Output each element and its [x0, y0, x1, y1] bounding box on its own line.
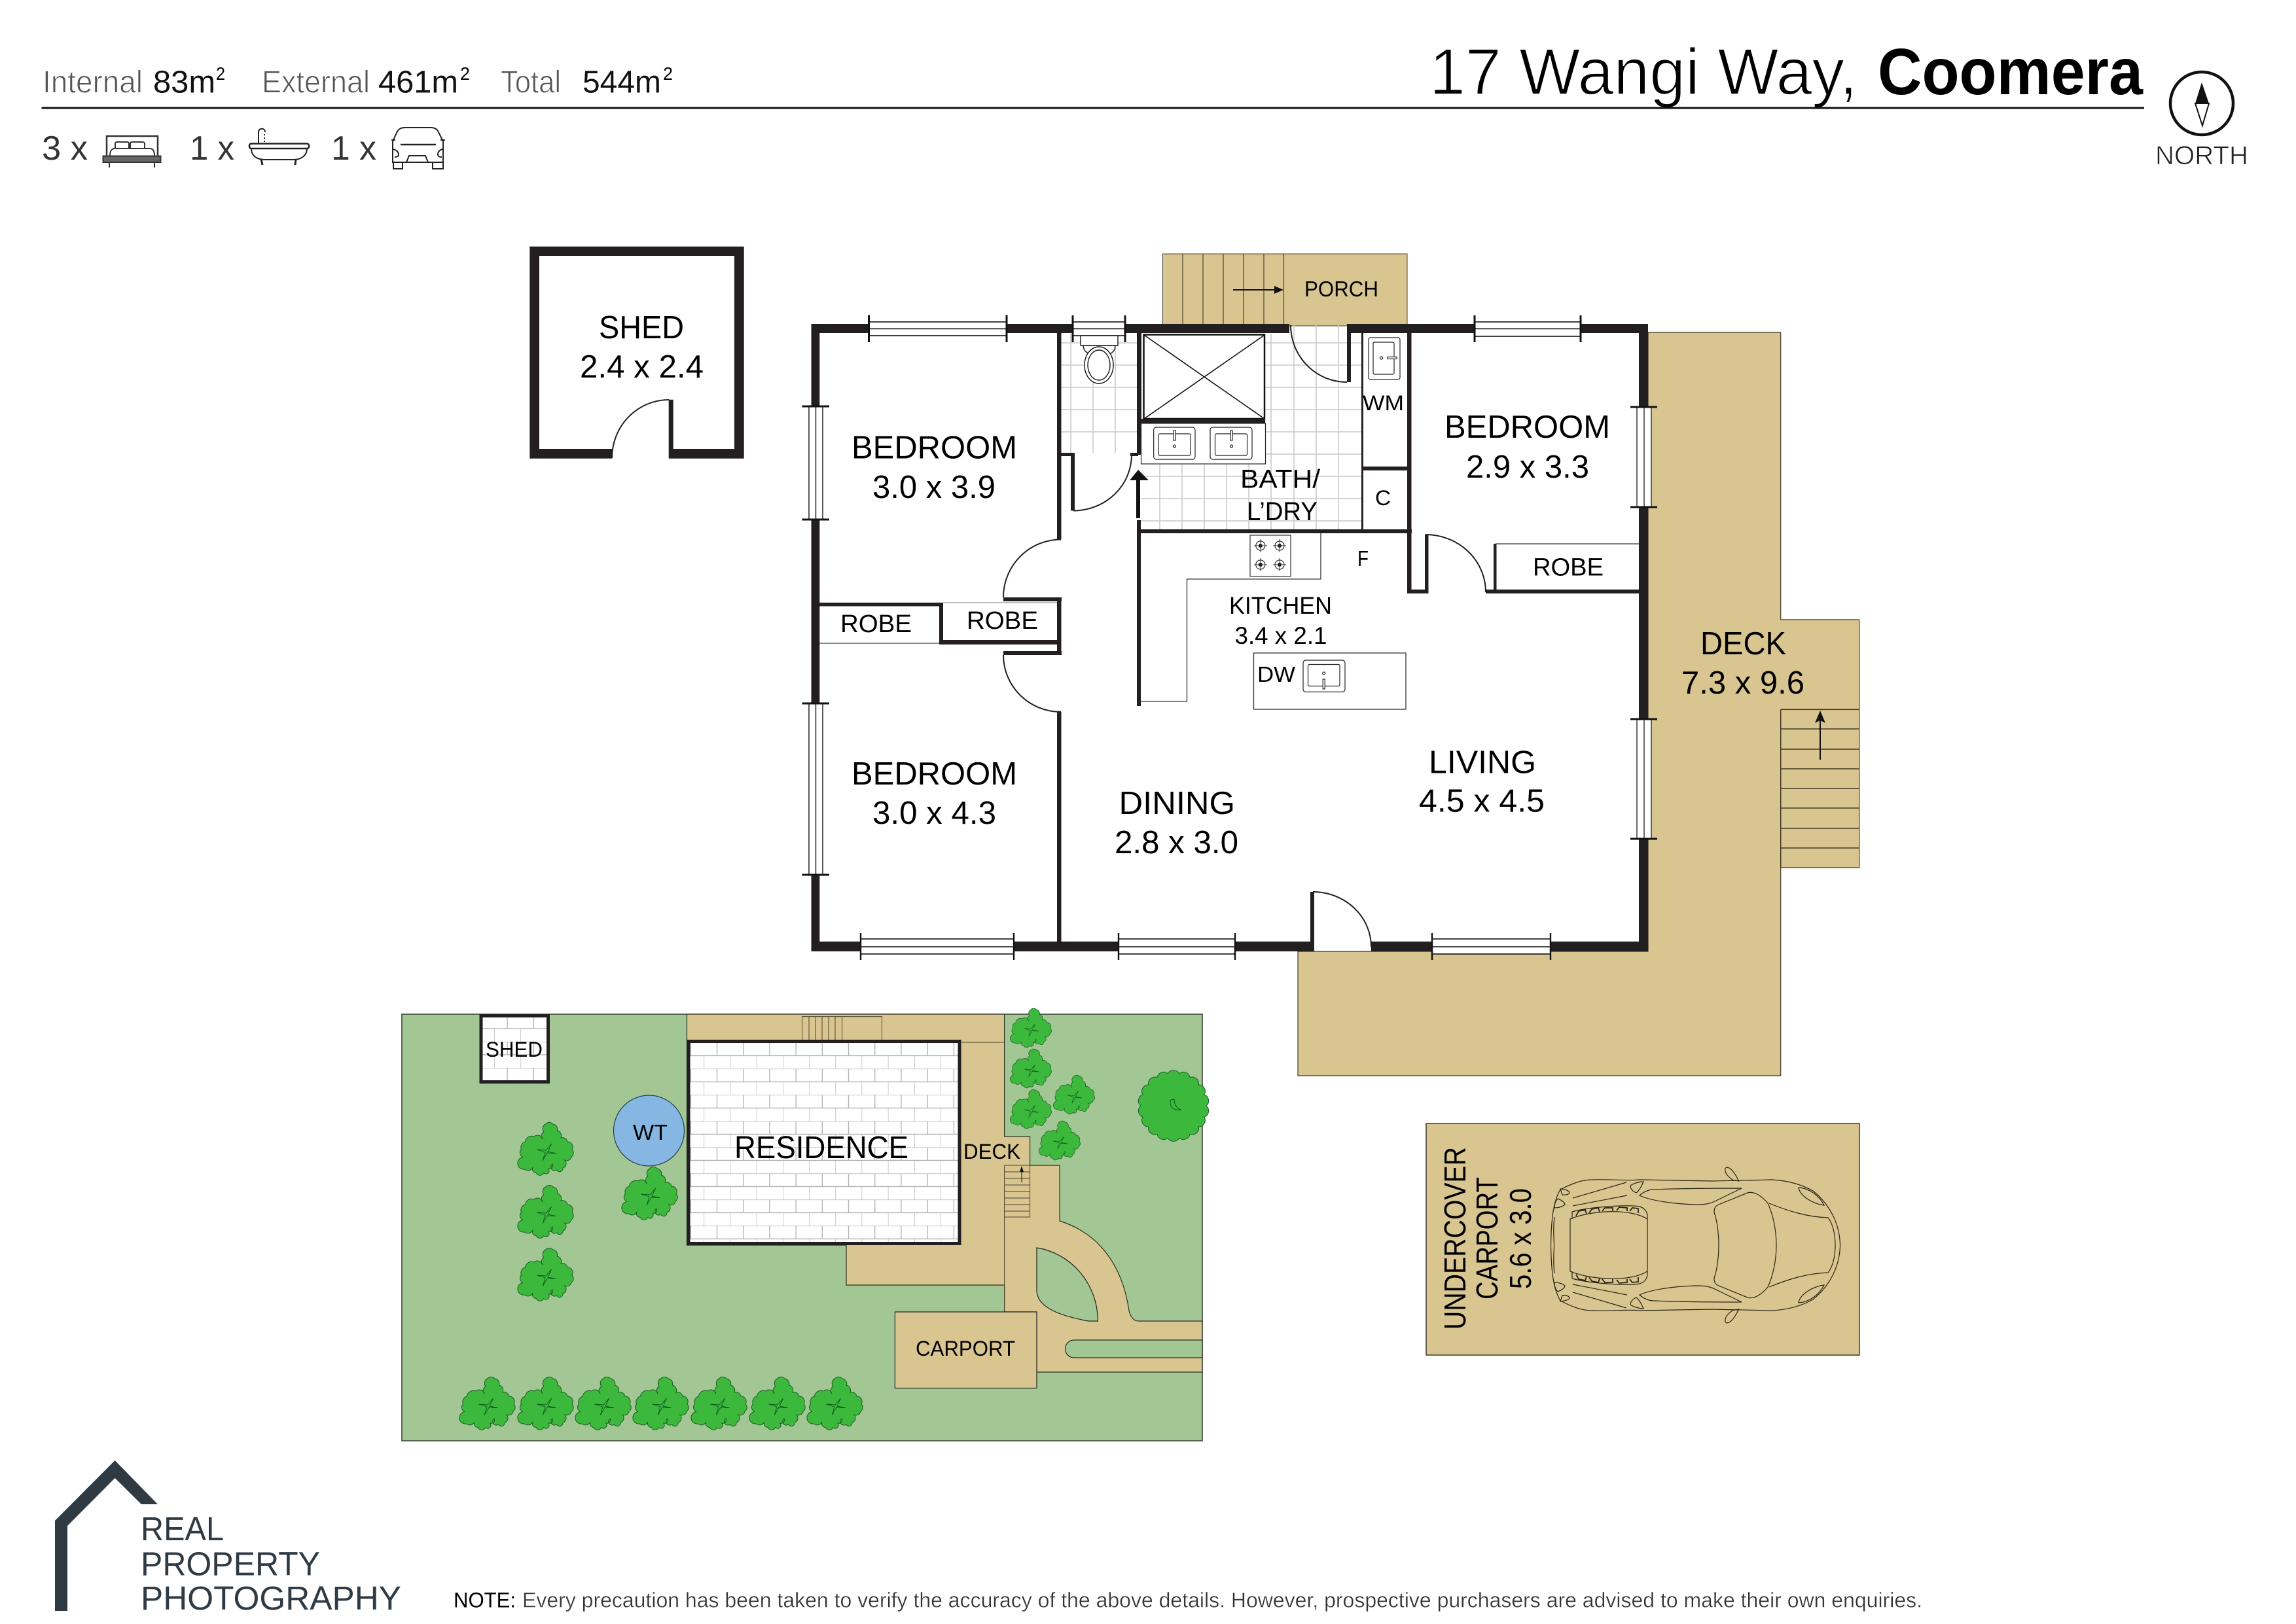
label: living: 4.5 x 4.5	[1419, 784, 1545, 819]
internal area	[43, 63, 225, 100]
panel: deck	[1298, 332, 1859, 1076]
total area: Total	[501, 65, 561, 100]
house walls	[812, 324, 1648, 951]
icon: compass	[2170, 72, 2233, 135]
logo wordmark: REAL	[141, 1510, 224, 1547]
right windows	[1630, 407, 1657, 839]
header stats	[43, 63, 673, 100]
site shed	[481, 1015, 548, 1082]
lawn	[402, 1014, 1202, 1441]
external area: 2	[460, 63, 470, 84]
panel: site plan	[402, 1008, 1209, 1441]
shed walls	[529, 247, 744, 459]
kitchen benches	[1141, 533, 1406, 709]
large tree	[1138, 1070, 1209, 1141]
room counts	[42, 128, 445, 169]
label: bedroom 3: 2.9 x 3.3	[1466, 450, 1589, 485]
label: bath and laundry: L’DRY	[1247, 497, 1318, 526]
label: fixtures: WM	[1363, 391, 1404, 415]
label: dining: DINING	[1119, 786, 1235, 821]
bathroom tiles	[1061, 325, 1361, 529]
shed label	[580, 310, 704, 385]
icon: cooktop	[1250, 535, 1291, 576]
site deck details	[802, 1017, 1030, 1312]
driveway island	[1037, 1248, 1098, 1321]
water tank label: WT	[633, 1120, 668, 1144]
label: fixtures: F	[1357, 546, 1369, 571]
room labels	[840, 391, 1610, 860]
trees: bottom row	[459, 1377, 863, 1430]
label: living	[1419, 745, 1545, 819]
label: kitchen: 3.4 x 2.1	[1234, 622, 1327, 649]
label: robes: ROBE	[840, 610, 912, 638]
icon: bath	[249, 129, 309, 165]
label: robes: ROBE	[1533, 554, 1604, 581]
trees: left column	[518, 1123, 677, 1301]
deck label: DECK	[1700, 626, 1786, 662]
title: Coomera	[1878, 35, 2144, 109]
shower	[1141, 335, 1265, 423]
total area	[501, 63, 673, 100]
label: bath and laundry	[1240, 465, 1321, 526]
external area: External	[262, 65, 370, 100]
carport label: UNDERCOVER	[1438, 1147, 1472, 1330]
title	[1429, 35, 2144, 109]
label: robes: ROBE	[967, 607, 1038, 635]
icon: toilet	[1081, 336, 1118, 383]
top windows	[869, 315, 1581, 342]
bath entry arrow	[1130, 470, 1149, 518]
label: fixtures	[1257, 391, 1404, 686]
deck stairs	[1781, 709, 1859, 868]
deck label: 7.3 x 9.6	[1681, 665, 1804, 701]
shed label: 2.4 x 2.4	[580, 349, 704, 385]
header rule	[42, 107, 2144, 109]
internal area: Internal	[43, 65, 143, 100]
label: dining	[1115, 786, 1238, 860]
label: kitchen	[1229, 592, 1332, 649]
title: 17 Wangi Way,	[1429, 35, 1857, 109]
label: bedroom 2: BEDROOM	[852, 756, 1017, 792]
external area	[262, 63, 470, 100]
icon: car top view	[1551, 1167, 1840, 1323]
label: kitchen: KITCHEN	[1229, 592, 1332, 619]
windows	[802, 315, 1657, 960]
internal area: 2	[216, 63, 225, 84]
logo mark: house	[55, 1460, 158, 1611]
logo wordmark	[141, 1510, 401, 1617]
shed label: SHED	[599, 310, 684, 345]
external area: 461m	[378, 65, 458, 100]
disclaimer note: NOTE:	[454, 1589, 516, 1612]
bottom windows	[861, 933, 1551, 960]
laundry sink	[1369, 338, 1400, 380]
label: bedroom 1: 3.0 x 3.9	[872, 470, 996, 505]
total area: 2	[663, 63, 673, 84]
driveway strip	[1066, 1340, 1202, 1358]
residence label: RESIDENCE	[734, 1131, 908, 1165]
panel: porch	[1162, 254, 1407, 326]
carport label: CARPORT	[916, 1337, 1015, 1360]
label: bedroom 1	[852, 431, 1017, 505]
deck label	[1681, 626, 1804, 701]
panel: undercover carport	[1426, 1123, 1859, 1355]
baths count: 1 x	[190, 130, 234, 168]
left windows	[802, 406, 829, 875]
deck and driveway	[687, 1014, 1202, 1372]
porch label: PORCH	[1304, 277, 1378, 301]
label: bedroom 3: BEDROOM	[1444, 410, 1610, 445]
label: bedroom 2	[852, 756, 1017, 831]
label: bedroom 2: 3.0 x 4.3	[872, 796, 996, 831]
porch arrow	[1233, 286, 1283, 294]
disclaimer note: Every precaution has been taken to verify the accuracy of the above details. However, prospective purchasers are advised to make their own enquiries.	[522, 1589, 1922, 1612]
north label: NORTH	[2155, 141, 2248, 170]
trees: right cluster	[1010, 1008, 1095, 1160]
kitchen sink	[1303, 660, 1345, 692]
residence	[689, 1042, 960, 1243]
label: living: LIVING	[1429, 745, 1536, 780]
label: robes	[840, 554, 1604, 638]
label: bedroom 3	[1444, 410, 1610, 485]
icon: bed	[103, 136, 161, 168]
carport label	[1438, 1147, 1537, 1330]
vanity with sinks	[1141, 423, 1266, 464]
label: bedroom 1: BEDROOM	[852, 431, 1017, 466]
carport label: 5.6 x 3.0	[1503, 1188, 1537, 1289]
carport label: CARPORT	[1470, 1177, 1504, 1299]
water tank	[614, 1095, 685, 1166]
site deck label: DECK	[963, 1140, 1020, 1163]
label: fixtures: DW	[1257, 662, 1296, 686]
icon: car	[391, 128, 445, 169]
logo wordmark: PROPERTY	[141, 1545, 320, 1582]
label: dining: 2.8 x 3.0	[1115, 825, 1238, 860]
logo	[55, 1460, 401, 1617]
carport block	[895, 1312, 1037, 1388]
door swing	[612, 400, 669, 458]
label: fixtures: C	[1375, 486, 1391, 510]
parking count: 1 x	[331, 130, 376, 168]
bedrooms count: 3 x	[42, 130, 88, 168]
label: bath and laundry: BATH/	[1240, 465, 1321, 494]
logo wordmark: PHOTOGRAPHY	[141, 1580, 401, 1617]
internal area: 83m	[153, 65, 215, 100]
site shed label: SHED	[486, 1038, 543, 1061]
shed floor plan	[529, 247, 744, 459]
door swings	[1003, 325, 1486, 947]
total area: 544m	[583, 65, 661, 100]
arrow	[1815, 711, 1825, 760]
